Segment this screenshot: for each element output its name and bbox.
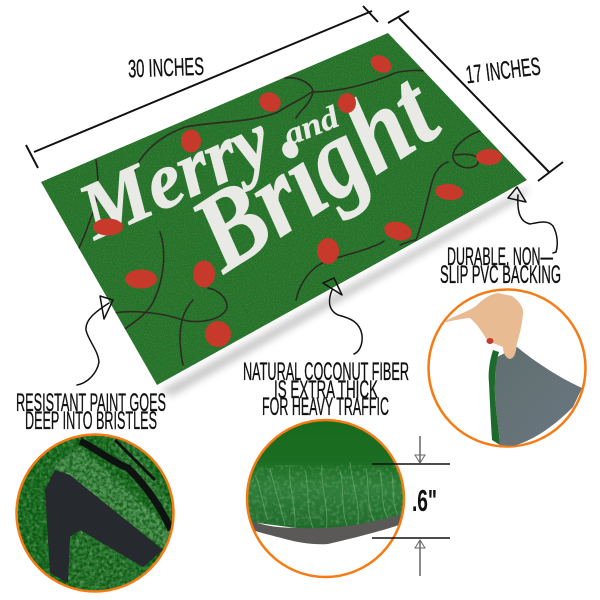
- circle: backing closeup: [428, 290, 586, 446]
- dimension: 17 inches: 17 INCHES: [464, 52, 542, 89]
- label: fiber: IS EXTRA THICK: [274, 376, 378, 404]
- label: fiber: FOR HEAVY TRAFFIC: [262, 393, 389, 421]
- fiber strands: [255, 462, 398, 532]
- thickness dimension: [372, 436, 450, 576]
- greeting text: [80, 80, 442, 276]
- fingernail: [486, 338, 494, 344]
- mat shadow: [160, 186, 530, 396]
- label: fiber: NATURAL COCONUT FIBER: [243, 358, 409, 386]
- light string wires: [78, 70, 500, 365]
- door mat: [30, 25, 535, 395]
- greeting text: and: [278, 98, 345, 152]
- label: paint: DEEP INTO BRISTLES: [25, 407, 157, 435]
- thickness dimension: .6": [412, 483, 437, 518]
- dimension: 30 inches: [26, 6, 378, 168]
- arrow: to backing: [508, 187, 557, 253]
- hand: [443, 293, 523, 359]
- greeting text: Merry: [65, 95, 284, 257]
- label: paint: RESISTANT PAINT GOES: [16, 389, 166, 417]
- circle: paint closeup: [15, 433, 175, 600]
- dimension: 30 inches: 30 INCHES: [128, 53, 205, 83]
- dimension: 17 inches: [388, 11, 563, 181]
- arrow: to fiber: [323, 278, 362, 354]
- arrow: to paint: [77, 296, 113, 385]
- label: fiber: [243, 358, 409, 421]
- circle: fiber closeup: [245, 418, 410, 583]
- label: backing: [440, 243, 561, 289]
- red bulbs: [93, 52, 502, 347]
- label: paint: [16, 389, 166, 435]
- greeting text: Bright: [169, 47, 459, 295]
